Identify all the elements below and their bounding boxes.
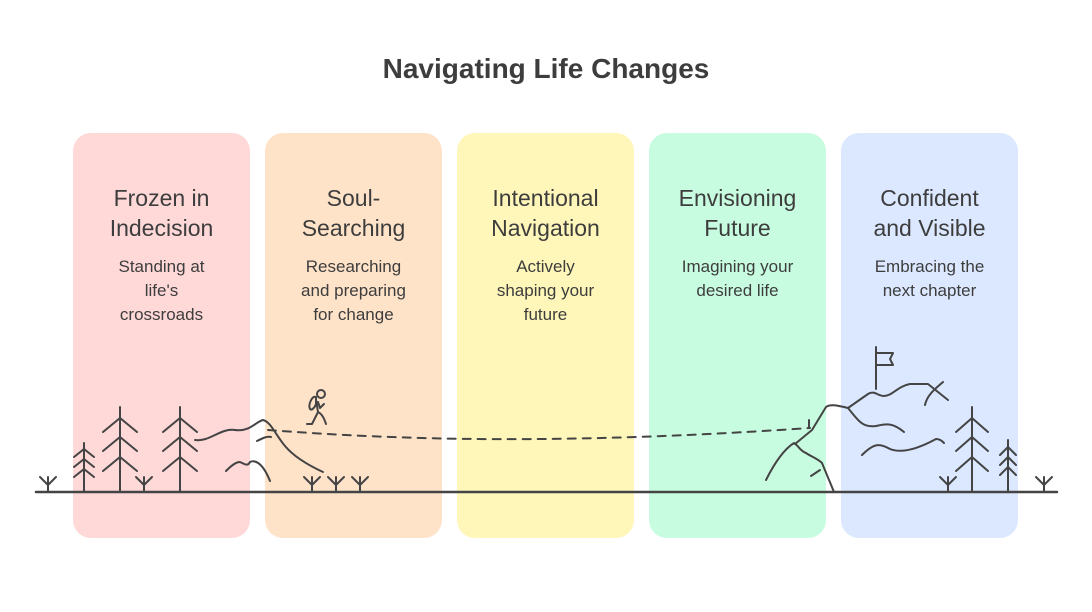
hiker	[307, 390, 326, 424]
panel: confident and visible	[841, 133, 1018, 538]
trees right	[956, 407, 1016, 492]
right mountain	[766, 382, 948, 492]
trees left	[74, 407, 197, 492]
panel: intentional navigation: Intentional	[492, 185, 599, 211]
panel: envisioning future: Imagining your	[682, 257, 793, 276]
panel: frozen in indecision: Indecision	[110, 215, 213, 241]
panel: soul-searching: for change	[313, 305, 394, 324]
panel: soul-searching	[265, 133, 442, 538]
panel: frozen in indecision	[73, 133, 250, 538]
sprouts	[40, 477, 1052, 492]
panel: intentional navigation: Navigation	[491, 215, 600, 241]
panel: confident and visible: and Visible	[873, 215, 986, 241]
panel: frozen in indecision: Standing at	[118, 257, 204, 276]
panel: soul-searching: Researching	[306, 257, 401, 276]
panel: confident and visible: next chapter	[883, 281, 976, 300]
panel: soul-searching: Searching	[302, 215, 405, 241]
panel: intentional navigation: future	[524, 305, 567, 324]
panel: intentional navigation	[457, 133, 634, 538]
panel: soul-searching: and preparing	[301, 281, 406, 300]
panel: frozen in indecision: Frozen in	[114, 185, 209, 211]
panel: envisioning future	[649, 133, 826, 538]
title: Navigating Life Changes	[383, 53, 709, 84]
panel: soul-searching: Soul-	[327, 185, 380, 211]
dashed path	[268, 420, 810, 439]
flag	[876, 347, 893, 389]
panel: confident and visible: Embracing the	[875, 257, 984, 276]
panel: envisioning future: desired life	[696, 281, 779, 300]
panel: intentional navigation: Actively	[516, 257, 575, 276]
panel: frozen in indecision: life's	[145, 281, 178, 300]
hills left	[195, 420, 323, 481]
panel: frozen in indecision: crossroads	[120, 305, 203, 324]
panel: confident and visible: Confident	[880, 185, 979, 211]
panel: envisioning future: Future	[704, 215, 771, 241]
panel: intentional navigation: shaping your	[497, 281, 594, 300]
panel: envisioning future: Envisioning	[679, 185, 796, 211]
